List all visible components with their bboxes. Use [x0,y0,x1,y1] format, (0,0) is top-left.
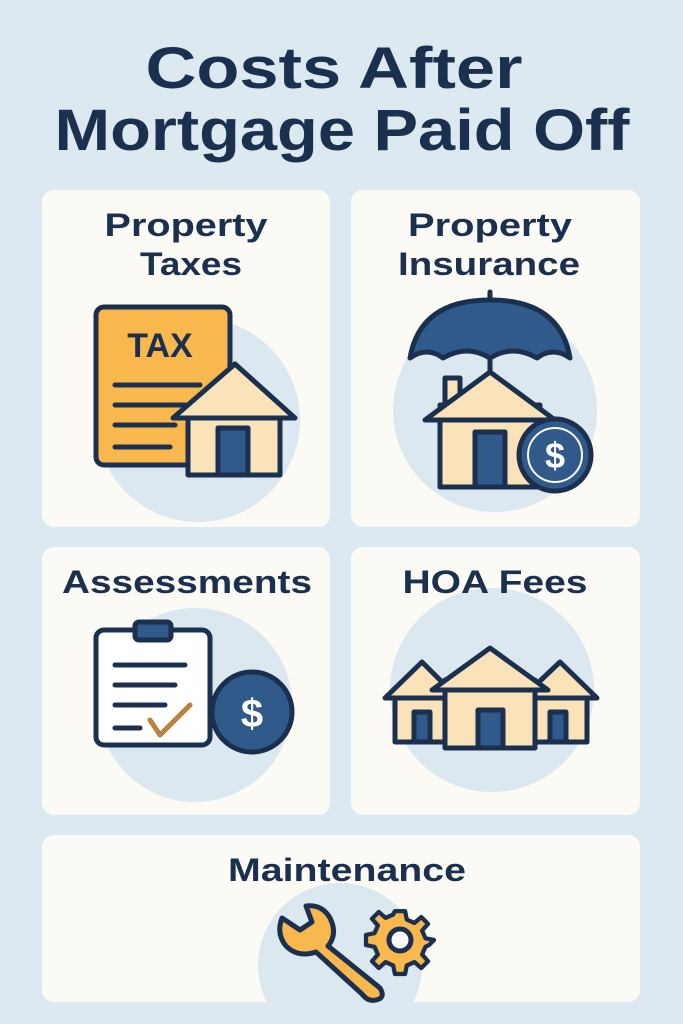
icon: umbrella over house with dollar [410,292,591,491]
panel: property insurance [351,190,640,527]
panel: maintenance [42,835,640,1003]
heading: HOA fees: HOA Fees [402,564,588,600]
panel: property taxes [42,190,330,527]
icon: tax document and house: TAX [127,327,193,365]
icon: tax document and house [96,307,295,475]
heading: property insurance: Insurance [398,246,580,282]
panel: HOA fees [351,547,640,815]
heading: property taxes: Property [104,207,268,243]
icon: three houses [385,648,597,748]
icon: umbrella over house with dollar: $ [545,435,565,476]
title: Costs After [146,36,522,101]
heading: property taxes [104,207,268,282]
heading: maintenance: Maintenance [228,852,466,888]
icon: clipboard with dollar [96,622,292,752]
heading: property insurance [398,207,580,282]
heading: property insurance: Property [408,207,572,243]
icon: clipboard with dollar: $ [241,692,263,736]
panel: assessments [42,547,330,815]
title [54,36,630,163]
heading: property taxes: Taxes [140,246,242,282]
icon: wrench and gear [280,906,434,1000]
heading: assessments: Assessments [62,564,312,600]
title: Mortgage Paid Off [54,98,630,163]
